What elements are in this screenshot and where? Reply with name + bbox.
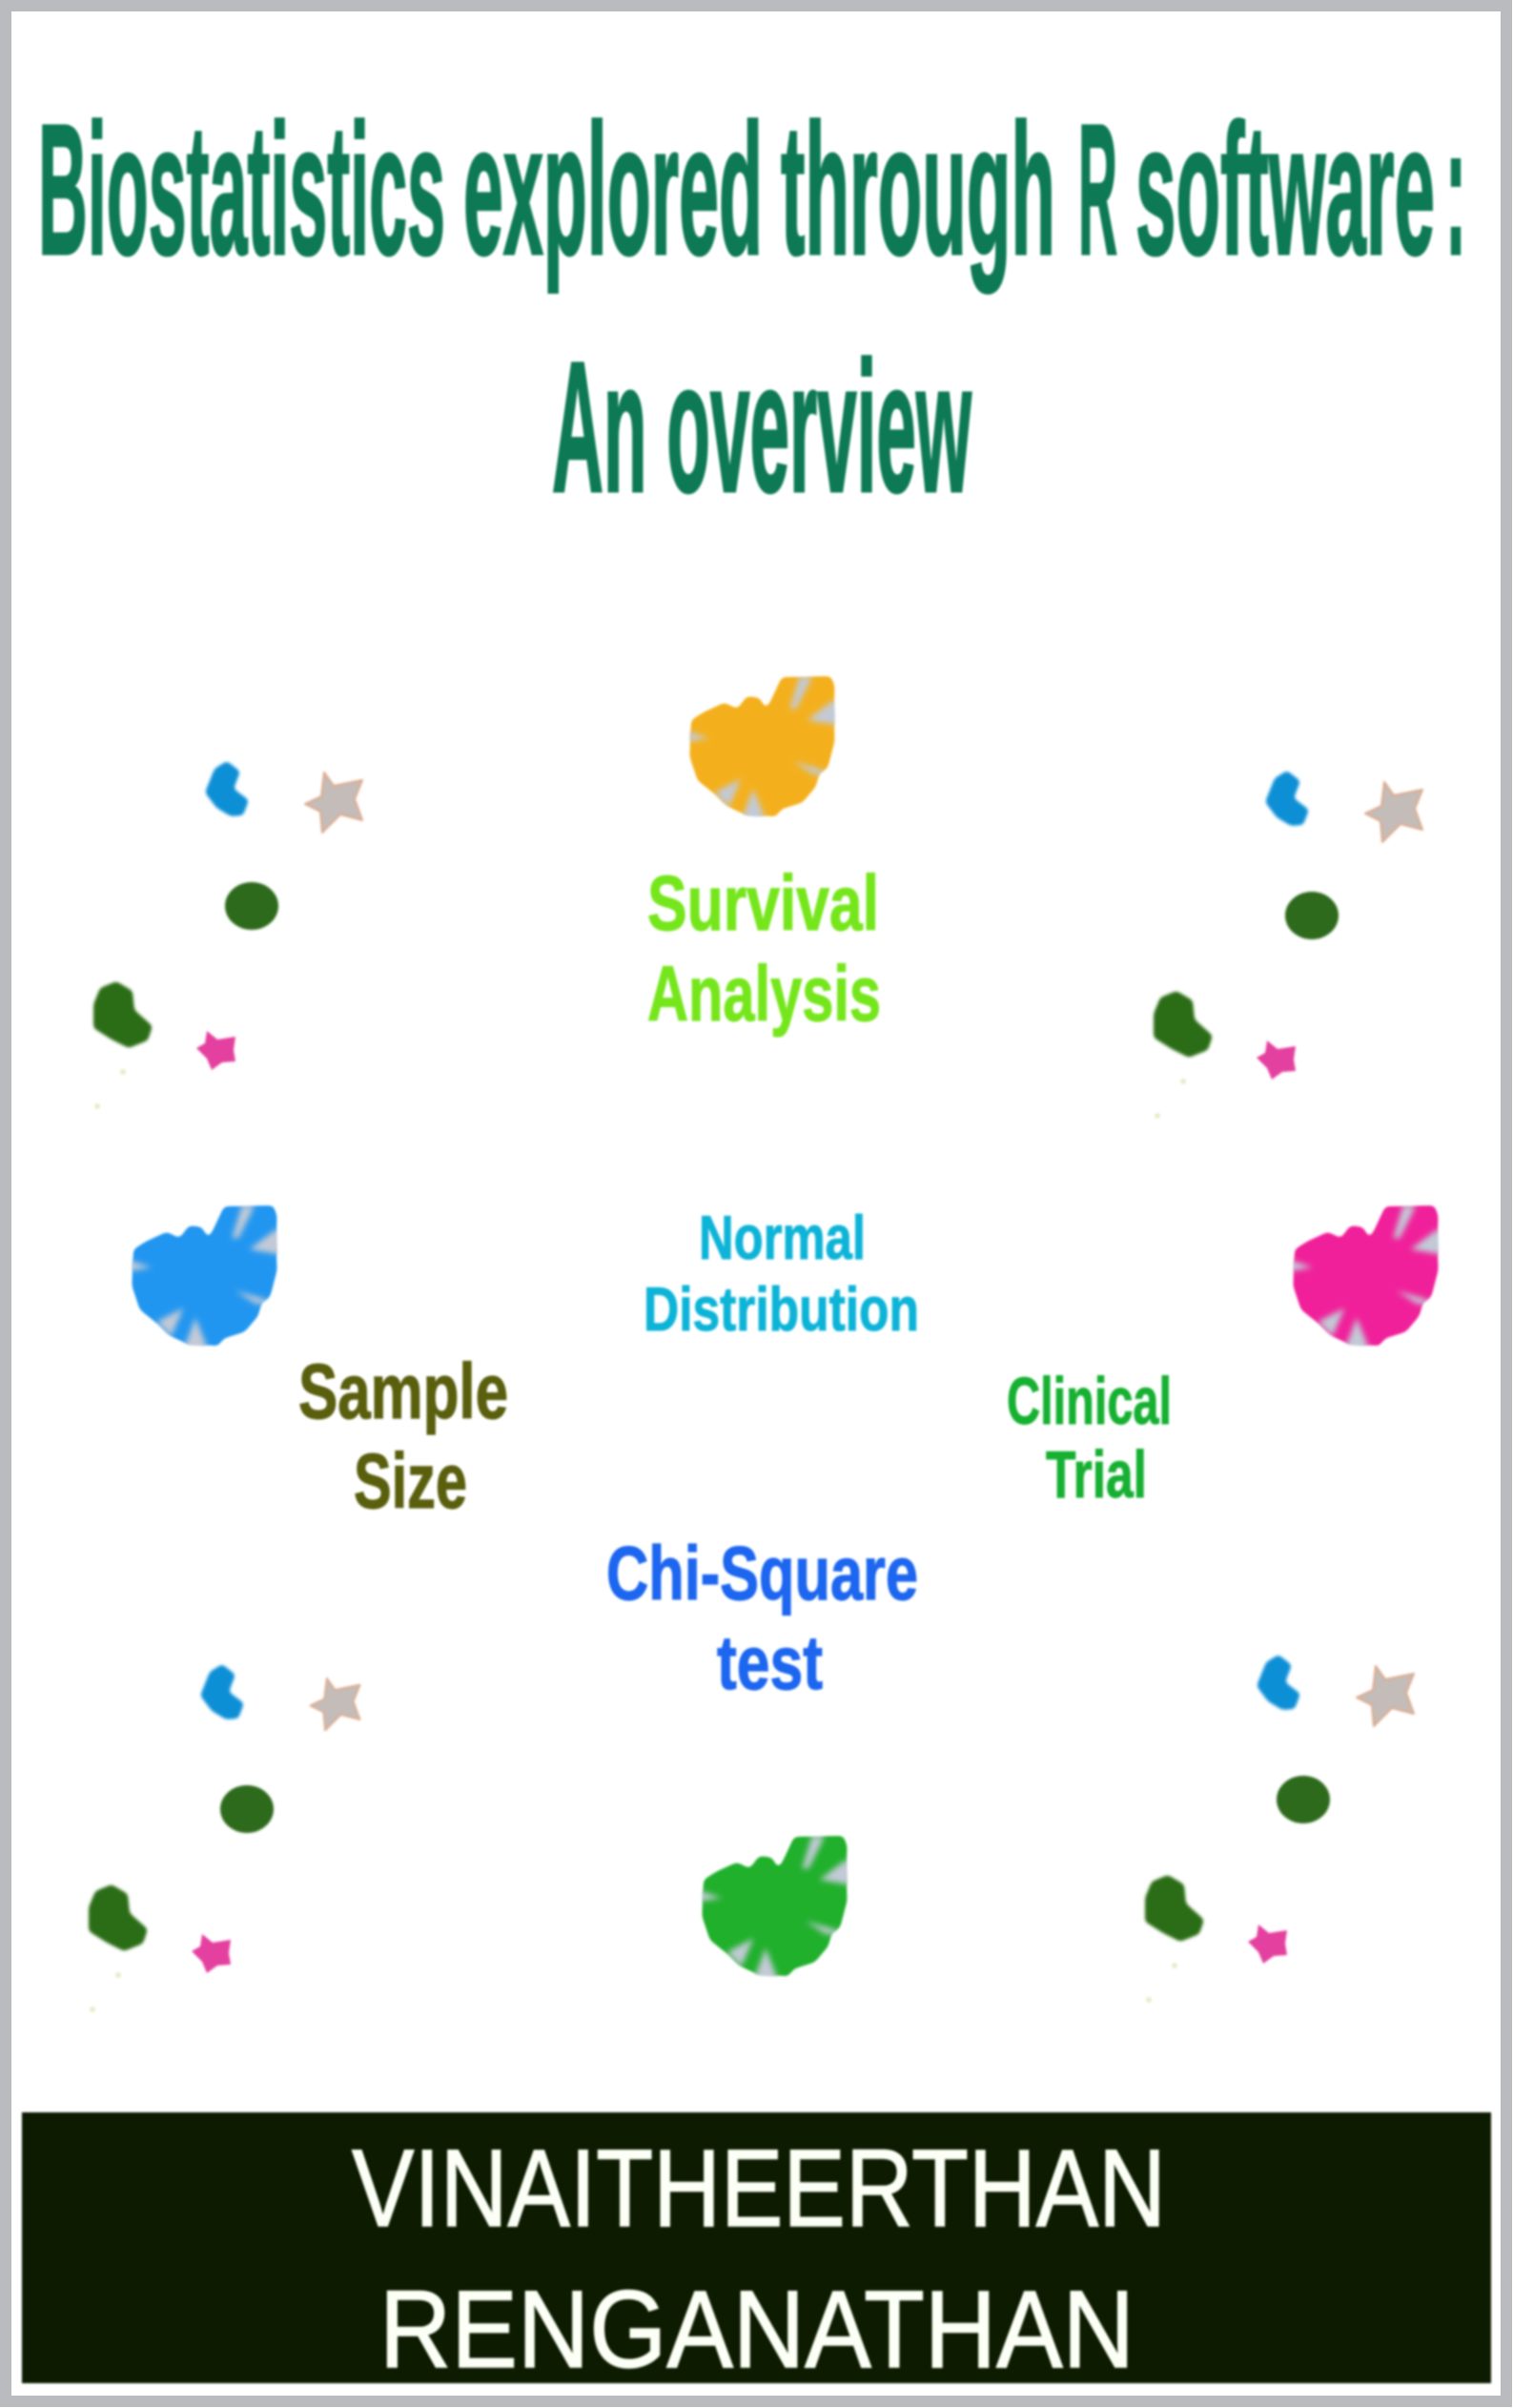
label: Clinical Trial [1007,1364,1172,1512]
label: Survival Analysis: Survival [647,860,879,947]
icon cluster: top right [1154,771,1422,1119]
label: Normal Distribution: Distribution [644,1274,919,1344]
label: Survival Analysis [647,860,881,1038]
title [38,86,1466,531]
title: through [781,86,1055,294]
label: Clinical Trial: Trial [1046,1437,1147,1512]
author banner: VINAITHEERTHAN [352,2128,1166,2250]
author banner [22,2112,1491,2391]
title: explored [463,86,763,294]
author banner: RENGANATHAN [379,2269,1135,2391]
text: : [1445,86,1466,294]
title: Biostatistics [38,86,445,294]
label: Chi-Square test: test [717,1620,823,1705]
icon: blue leaf [132,1205,277,1347]
title: R [1078,86,1117,294]
label: Clinical Trial: Clinical [1007,1364,1172,1438]
label: Chi-Square test: Chi-Square [606,1531,918,1616]
icon: yellow leaf [689,676,835,817]
icon cluster: bottom left [89,1664,360,2012]
icon cluster: top left [93,761,362,1109]
icon: green leaf [702,1836,848,1977]
label: Normal Distribution [644,1203,919,1344]
label: Sample Size [298,1348,508,1525]
label: Sample Size: Size [354,1438,467,1525]
icon: pink leaf [1293,1205,1439,1347]
label: Normal Distribution: Normal [699,1203,866,1272]
label: Chi-Square test [606,1531,918,1705]
icon cluster: bottom right [1145,1655,1414,2003]
label: Sample Size: Sample [298,1348,508,1435]
label: Survival Analysis: Analysis [647,951,881,1038]
